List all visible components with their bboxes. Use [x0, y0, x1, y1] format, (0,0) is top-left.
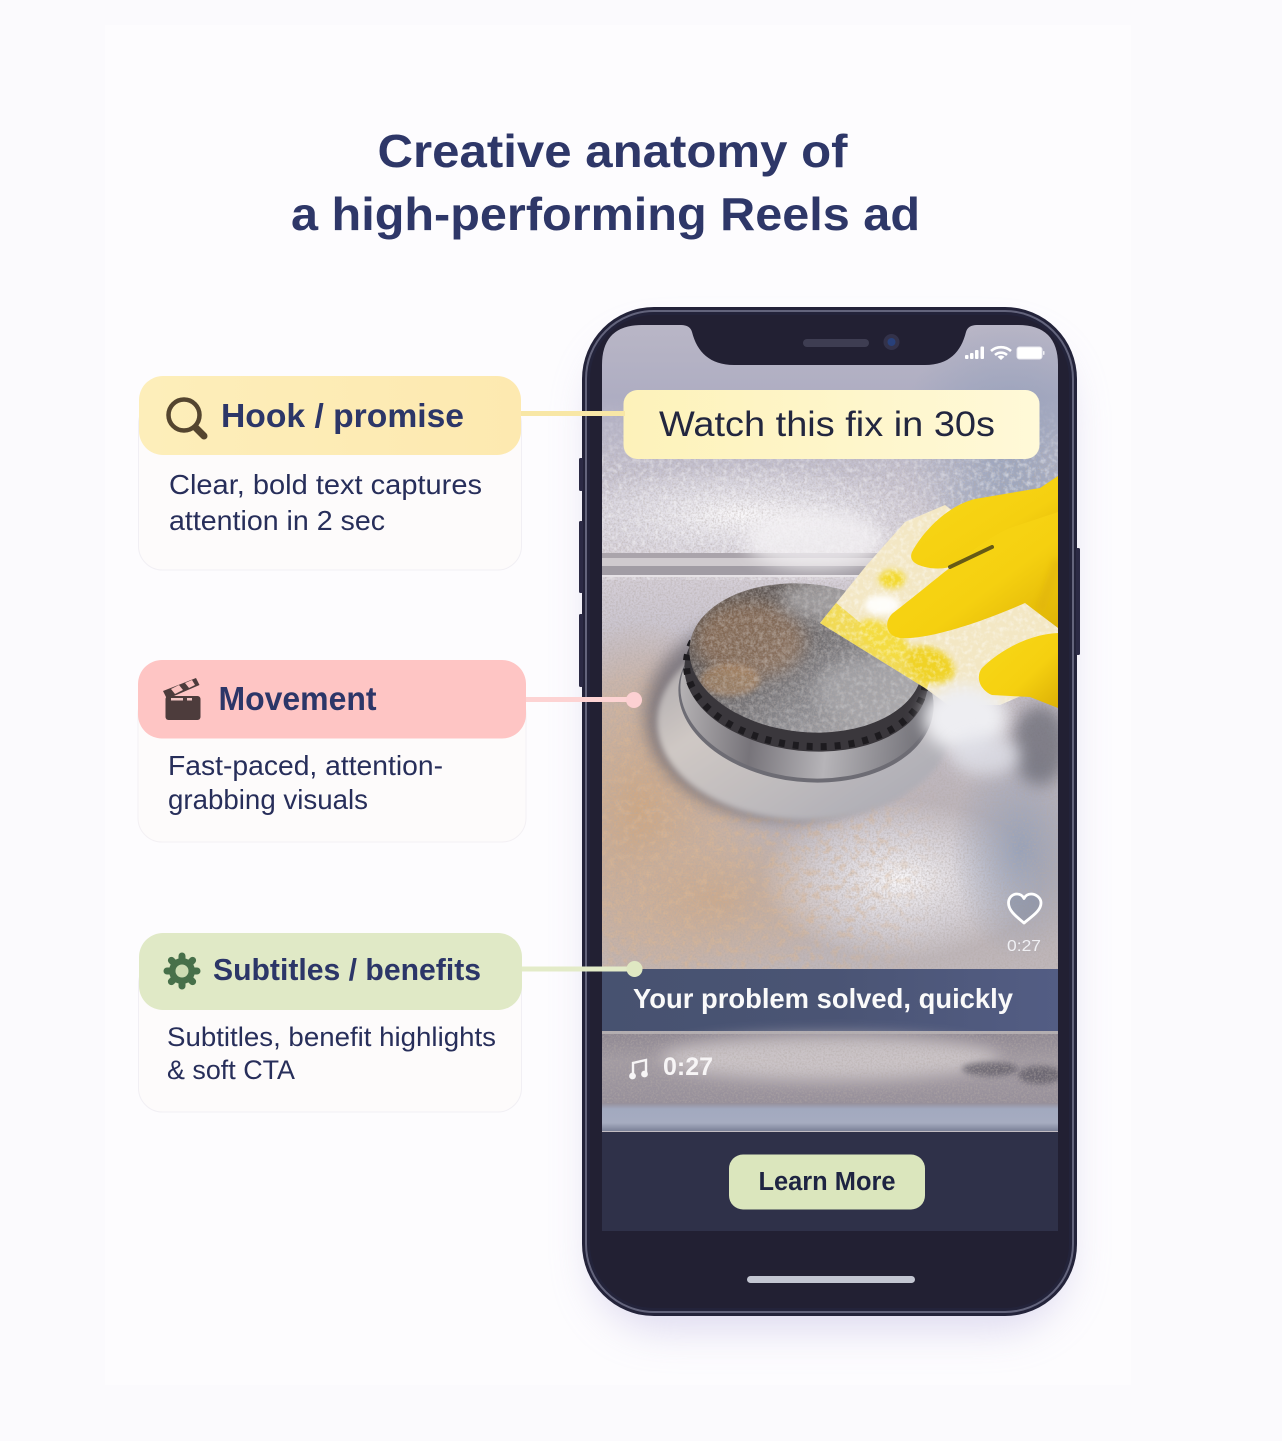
description — [168, 750, 443, 815]
button: Learn More: Learn More — [758, 1168, 896, 1196]
phone shadow — [592, 340, 1068, 1330]
video screen — [602, 325, 1058, 1231]
photo: sponge — [820, 505, 1058, 710]
CTA bar — [602, 1132, 1058, 1231]
description — [169, 469, 482, 536]
photo: stovetop background — [602, 325, 1058, 1132]
connector — [522, 966, 628, 972]
like time: 0:27 — [1007, 938, 1041, 955]
description: attention in 2 sec — [169, 505, 385, 536]
phone body — [582, 307, 1077, 1316]
icon: gear — [167, 956, 197, 986]
photo: metal ridge — [602, 553, 878, 577]
heading: Hook / promise — [221, 397, 464, 434]
connector — [520, 411, 625, 416]
photo: burner — [645, 572, 953, 820]
description — [167, 1022, 496, 1085]
notch speaker — [803, 339, 869, 347]
phone — [578, 307, 1082, 1343]
icon: magnifying glass — [168, 400, 204, 436]
heading: Subtitles / benefits — [213, 953, 481, 987]
description: Fast-paced, attention- — [168, 750, 443, 781]
heading bar — [139, 933, 522, 1010]
home indicator — [747, 1276, 915, 1283]
card body — [138, 960, 522, 1112]
heading: Movement — [218, 680, 377, 717]
callout pill: hook text — [624, 390, 1040, 459]
description: & soft CTA — [167, 1055, 295, 1085]
description: Subtitles, benefit highlights — [167, 1022, 496, 1052]
description: grabbing visuals — [168, 784, 368, 815]
description: Clear, bold text captures — [169, 469, 482, 500]
lower metal strip — [602, 1031, 1062, 1131]
panel: Movement — [138, 660, 642, 842]
panel: Subtitles / benefits — [138, 933, 642, 1112]
subtitle band — [602, 969, 1058, 1031]
music time: 0:27 — [663, 1053, 713, 1081]
icon: clapperboard — [163, 678, 200, 720]
status icons — [965, 346, 1044, 360]
panel: Hook / promise — [138, 376, 625, 570]
heading bar — [139, 376, 521, 455]
card body — [138, 400, 522, 570]
photo: rust and grime — [602, 635, 752, 969]
subtitle text: Your problem solved, quickly — [633, 983, 1013, 1014]
title: Creative anatomy of — [378, 125, 848, 177]
heading bar — [138, 660, 526, 738]
title — [291, 125, 920, 240]
button: Learn More — [729, 1154, 925, 1210]
photo: yellow glove — [887, 476, 1058, 708]
photo: soap suds — [923, 684, 1068, 785]
notch camera — [884, 334, 900, 350]
icon: heart — [1008, 894, 1041, 923]
icon: music note — [630, 1060, 647, 1078]
side buttons — [579, 458, 1080, 687]
inner panel — [105, 25, 1131, 1385]
callout pill: hook text: Watch this fix in 30s — [659, 404, 995, 444]
title: a high-performing Reels ad — [291, 188, 920, 240]
connector — [524, 697, 628, 702]
card body — [138, 690, 526, 842]
